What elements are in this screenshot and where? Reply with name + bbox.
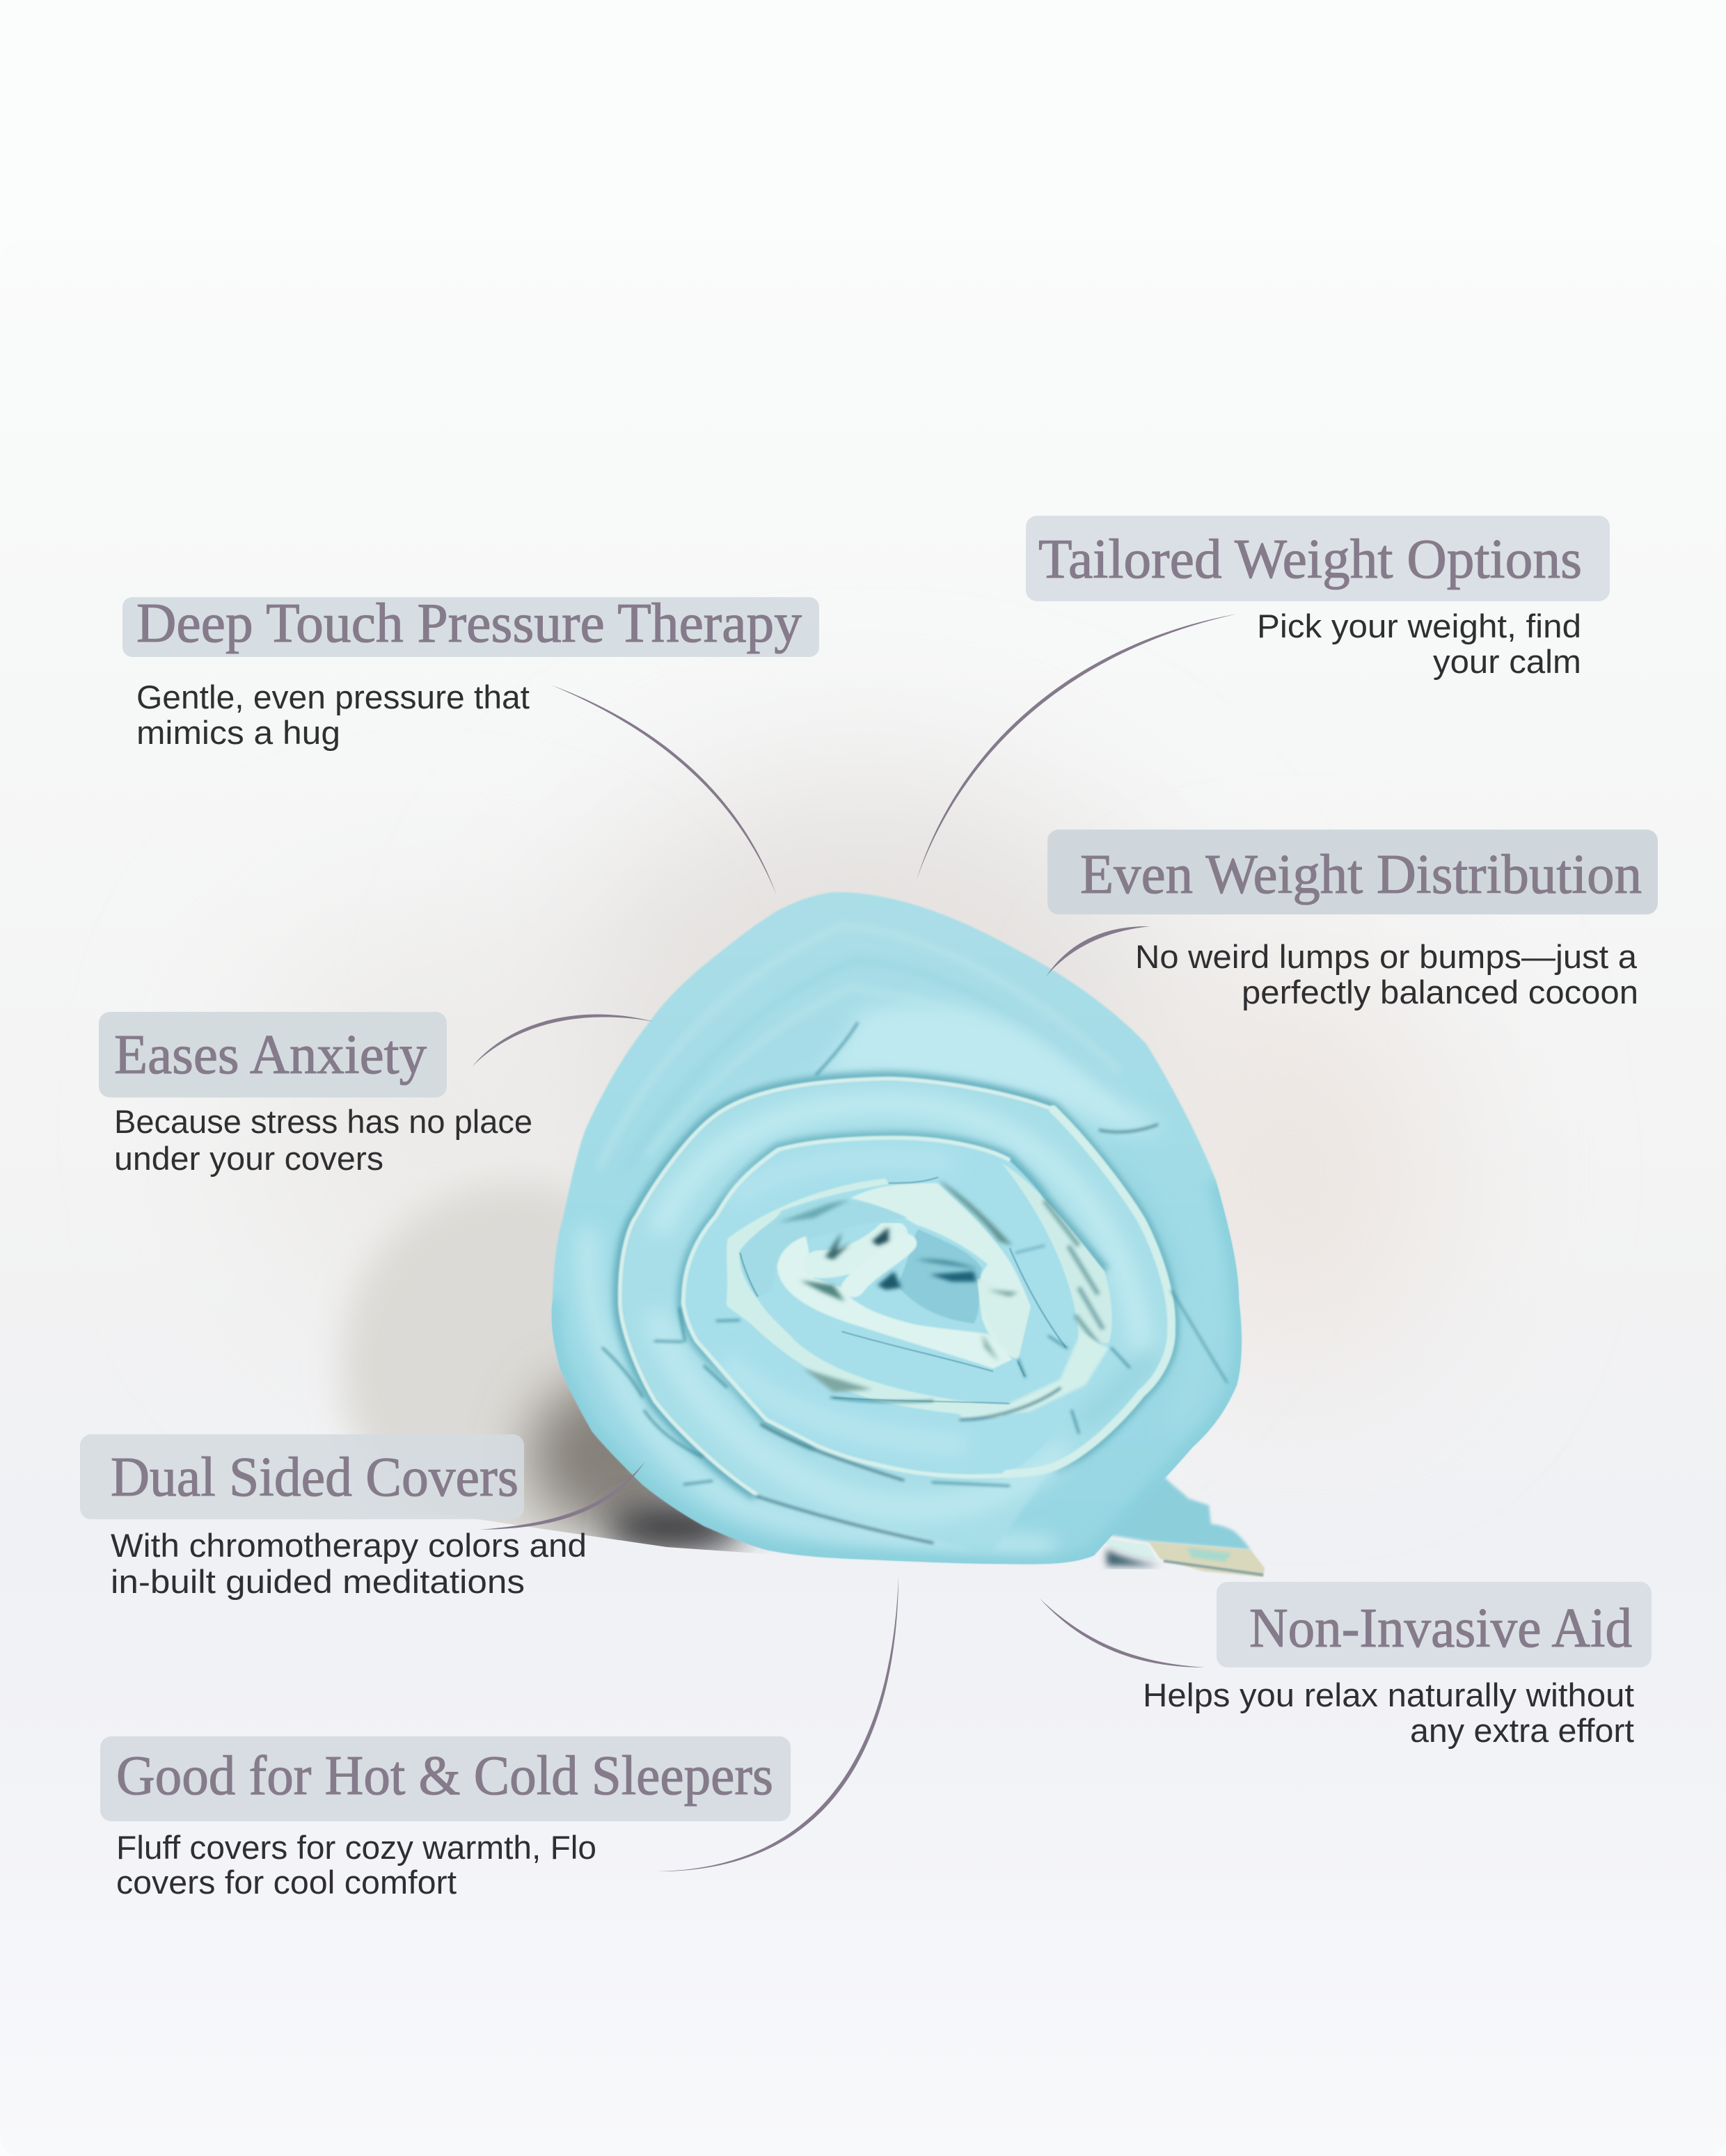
third coil highlights	[731, 1158, 960, 1444]
background	[0, 699, 1726, 1834]
text: Deep Touch description	[136, 679, 530, 751]
text: Tailored Weight description: your calm	[1433, 643, 1581, 680]
text: Even Weight description: No weird lumps or bumps—just a	[1135, 938, 1638, 975]
left mint lining band	[726, 1178, 1007, 1418]
heading: Non-Invasive Aid: Non-Invasive Aid	[1249, 1598, 1632, 1659]
arrow: Tailored Weight pointer	[917, 614, 1237, 880]
second coil highlights	[658, 1103, 1148, 1508]
inner mint coil	[777, 1237, 1013, 1369]
callout: Deep Touch Pressure Therapy	[122, 593, 819, 896]
blanket inner core spiral	[726, 1178, 1066, 1418]
core shadow streaks	[779, 1180, 1018, 1392]
text: Good for Hot & Cold description: covers for cool comfort	[116, 1864, 457, 1901]
text: Non-Invasive description: Helps you relax naturally without	[1143, 1677, 1634, 1713]
heading: Tailored Weight Options	[1026, 516, 1610, 601]
core edge lines	[740, 1178, 1066, 1404]
arrow: Deep Touch pointer	[551, 685, 777, 896]
heading: Good for Hot & Cold Sleepers: Good for Hot & Cold Sleepers	[116, 1745, 773, 1807]
blanket roll illustration	[552, 892, 1265, 1577]
mint strip lower right	[960, 1333, 1109, 1420]
text: Eases Anxiety description	[114, 1103, 532, 1177]
text: Non-Invasive description: any extra effort	[1410, 1712, 1634, 1749]
text: Non-Invasive description	[1143, 1677, 1634, 1749]
pleated mint lining right	[1002, 1164, 1112, 1347]
upper mint flap	[850, 1183, 1030, 1359]
mint sausage folds	[820, 1234, 905, 1287]
heading: Deep Touch Pressure Therapy: Deep Touch Pressure Therapy	[136, 593, 802, 654]
outer coil highlights	[570, 1225, 1059, 1557]
cavity blue	[740, 1200, 908, 1297]
heading: Non-Invasive Aid	[1217, 1582, 1652, 1667]
text: Good for Hot & Cold description	[116, 1829, 596, 1901]
heading: Dual Sided Covers	[80, 1434, 524, 1519]
arrow: Non-Invasive pointer	[1040, 1599, 1205, 1667]
heading: Eases Anxiety: Eases Anxiety	[114, 1024, 427, 1086]
heading: Tailored Weight Options: Tailored Weight Options	[1038, 529, 1582, 590]
callout: Non-Invasive Aid	[1040, 1582, 1652, 1749]
text: Good for Hot & Cold description: Fluff covers for cozy warmth, Flo	[116, 1829, 596, 1866]
third coil edge shadow	[683, 1138, 1105, 1445]
text: Even Weight description: perfectly balanced cocoon	[1242, 974, 1638, 1010]
heading: Dual Sided Covers: Dual Sided Covers	[111, 1447, 518, 1508]
quilted stripes on back of roll	[598, 956, 1118, 1167]
fold creases	[603, 1023, 1227, 1543]
heading: Eases Anxiety	[99, 1012, 447, 1097]
text: Deep Touch description: Gentle, even pressure that	[136, 679, 530, 715]
text: Tailored Weight description: Pick your weight, find	[1257, 608, 1581, 644]
callout: Eases Anxiety	[99, 1012, 654, 1177]
blanket outer body	[552, 892, 1242, 1564]
bottom and rim shade	[552, 1180, 1242, 1564]
text: Tailored Weight description	[1257, 608, 1581, 680]
heading: Even Weight Distribution: Even Weight Distribution	[1080, 844, 1642, 905]
text: Dual Sided description: With chromotherapy colors and	[111, 1527, 587, 1564]
heading: Good for Hot & Cold Sleepers	[100, 1736, 791, 1821]
callout: Even Weight Distribution	[1046, 830, 1658, 1010]
spiral piping lines	[620, 1079, 1171, 1494]
heading: Even Weight Distribution	[1047, 830, 1658, 914]
callout: Good for Hot & Cold Sleepers	[100, 1576, 898, 1901]
text: Deep Touch description: mimics a hug	[136, 714, 340, 751]
arrow: Eases Anxiety pointer	[472, 1014, 654, 1067]
text: Dual Sided description: in-built guided meditations	[111, 1563, 525, 1600]
piping shadow	[620, 1079, 1171, 1494]
top flap highlight	[823, 1002, 1157, 1137]
text: Eases Anxiety description: under your covers	[114, 1140, 383, 1177]
arrow: Good for Hot & Cold pointer	[657, 1576, 898, 1871]
third coil fill	[683, 1138, 1112, 1473]
blanket tail and tag	[1084, 1477, 1265, 1577]
callout: Tailored Weight Options	[917, 516, 1610, 880]
arrow: Even Weight pointer	[1046, 926, 1150, 976]
text: Even Weight description	[1135, 938, 1638, 1010]
text: Eases Anxiety description: Because stress has no place	[114, 1103, 532, 1140]
arrow: Dual Sided pointer	[480, 1461, 645, 1530]
right mint flap	[976, 1278, 1030, 1359]
text: Dual Sided description	[111, 1527, 587, 1600]
centre blue pocket	[897, 1230, 982, 1324]
second coil fill	[620, 1079, 1171, 1555]
flap lower shade	[1162, 1238, 1172, 1262]
callout: Dual Sided Covers	[80, 1434, 645, 1600]
